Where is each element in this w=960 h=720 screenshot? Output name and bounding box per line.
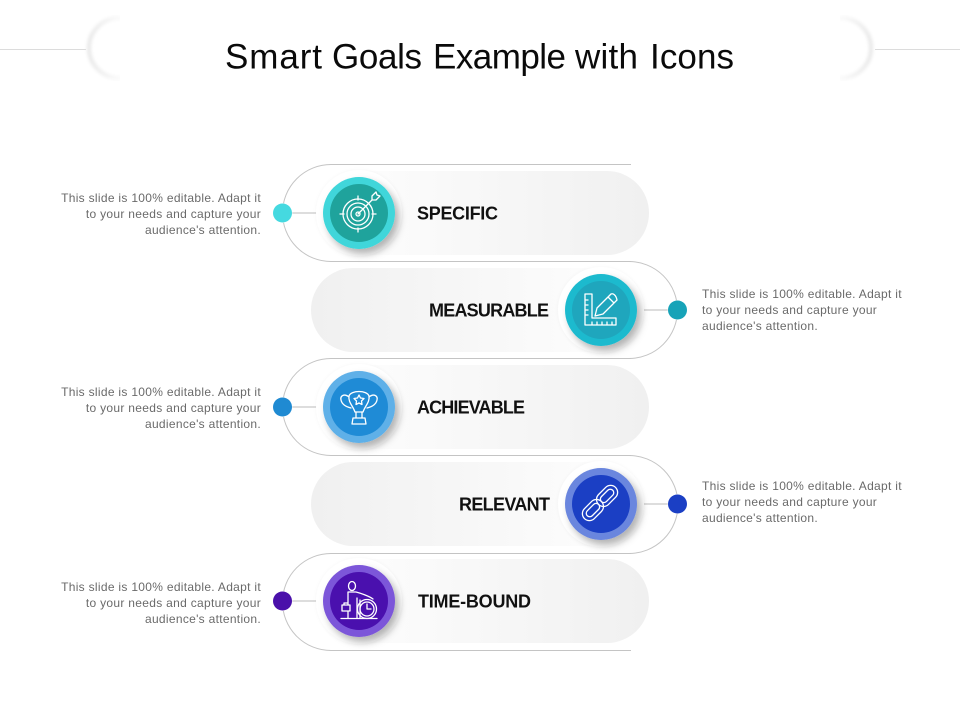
- title: Smart: [225, 38, 322, 76]
- title: Icons: [650, 38, 734, 76]
- row: time-bound: [272, 554, 649, 650]
- description: specific: This slide is 100% editable. Adapt it: [61, 191, 261, 205]
- outline: specific: [283, 164, 631, 262]
- description: specific: to your needs and capture your: [86, 207, 261, 221]
- icon badge: chain link: [558, 461, 644, 547]
- label: relevant: RELEVANT: [459, 494, 550, 514]
- description: time-bound: to your needs and capture your: [86, 596, 261, 610]
- row: measurable: [311, 262, 688, 358]
- connector dot: achievable: [272, 397, 317, 417]
- description: measurable: This slide is 100% editable. Adapt it: [702, 287, 902, 301]
- header decoration: right line and crescent: [850, 19, 960, 77]
- description: time-bound: audience's attention.: [145, 612, 261, 626]
- header decoration: left line and crescent: [0, 19, 110, 77]
- icon badge: target: [316, 170, 402, 256]
- description: achievable: audience's attention.: [145, 417, 261, 431]
- title: Example: [433, 38, 566, 76]
- title: with: [574, 38, 638, 76]
- connector dot: relevant: [643, 494, 688, 514]
- label: time-bound: TIME-BOUND: [418, 592, 531, 612]
- row: achievable: [272, 358, 649, 456]
- icon badge: ruler and pencil: [558, 267, 644, 353]
- description: measurable: audience's attention.: [702, 319, 818, 333]
- connector dot: time-bound: [272, 591, 317, 611]
- label: specific: SPECIFIC: [417, 204, 498, 224]
- description: time-bound: This slide is 100% editable. Adapt it: [61, 580, 261, 594]
- connector dot: specific: [272, 203, 317, 223]
- description: achievable: to your needs and capture your: [86, 401, 261, 415]
- label: measurable: MEASURABLE: [429, 300, 549, 320]
- pill: measurable: [311, 268, 645, 352]
- pill: specific: [315, 171, 649, 255]
- outline: relevant: [331, 456, 678, 554]
- label: achievable: ACHIEVABLE: [417, 398, 525, 418]
- description: specific: audience's attention.: [145, 223, 261, 237]
- row: specific: [272, 164, 649, 262]
- description: relevant: audience's attention.: [702, 511, 818, 525]
- icon badge: person with clock: [316, 558, 402, 644]
- pill: relevant: [311, 462, 645, 546]
- description: relevant: to your needs and capture your: [702, 495, 877, 509]
- description: relevant: This slide is 100% editable. Adapt it: [702, 479, 902, 493]
- title: Goals: [332, 38, 422, 76]
- row: relevant: [311, 456, 688, 554]
- connector dot: measurable: [643, 300, 688, 320]
- description: achievable: This slide is 100% editable. Adapt it: [61, 385, 261, 399]
- pill: achievable: [315, 365, 649, 449]
- outline: achievable: [282, 358, 631, 456]
- outline: measurable: [331, 262, 677, 358]
- outline: time-bound: [282, 554, 631, 650]
- description: measurable: to your needs and capture your: [702, 303, 877, 317]
- icon badge: trophy: [316, 364, 402, 450]
- pill: time-bound: [315, 559, 649, 643]
